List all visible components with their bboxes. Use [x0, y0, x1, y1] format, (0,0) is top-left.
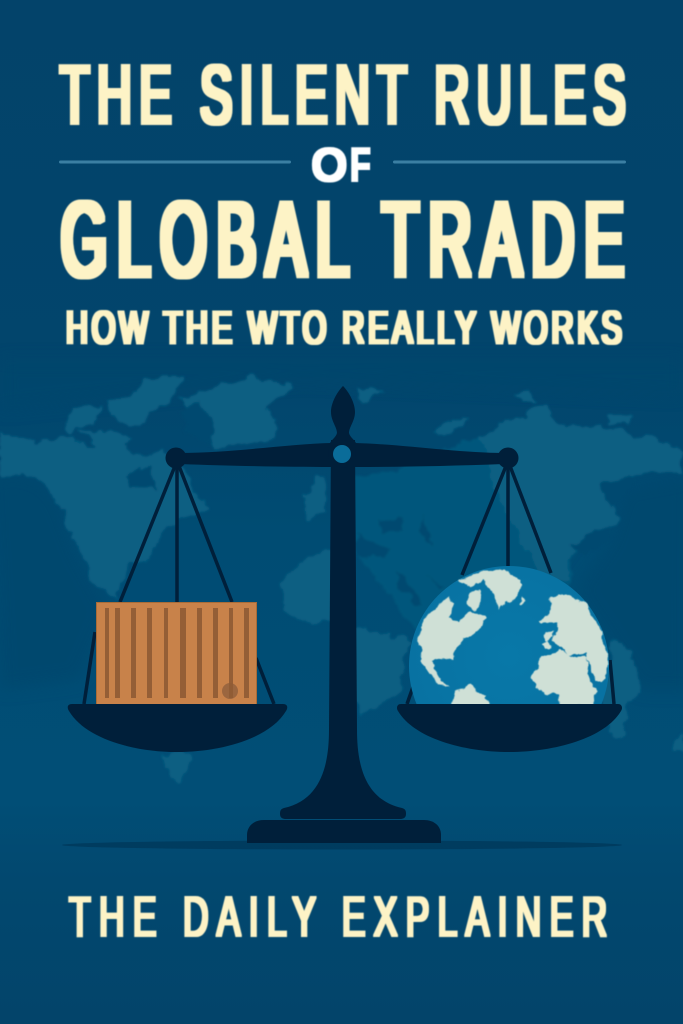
pivot — [328, 440, 356, 468]
word: of — [311, 138, 371, 191]
right pan — [397, 704, 622, 752]
globe — [409, 566, 610, 704]
publisher name: THE DAILY EXPLAINER — [69, 886, 607, 949]
beam end right — [498, 448, 518, 468]
title line two: GLOBAL TRADE — [61, 181, 624, 299]
left pan strings — [84, 466, 274, 704]
word: of: F — [350, 139, 371, 191]
scale base — [247, 820, 441, 843]
south america tip — [163, 753, 195, 780]
africa — [280, 545, 345, 625]
ground shadow — [62, 840, 622, 850]
right pan strings — [407, 466, 614, 704]
north america — [0, 433, 205, 600]
world map backdrop — [0, 360, 683, 780]
divider left — [59, 160, 291, 164]
beam — [180, 443, 504, 467]
left pan — [68, 704, 287, 752]
balance scale — [68, 386, 622, 843]
beam end left — [166, 448, 186, 468]
divider right — [393, 160, 626, 164]
pivot centre — [333, 445, 351, 463]
map europe mid tone — [345, 437, 572, 640]
scale post and base — [280, 440, 406, 819]
title line one: THE SILENT RULES — [60, 50, 625, 141]
finial — [329, 386, 357, 446]
greenland — [178, 376, 293, 450]
subtitle: HOW THE WTO REALLY WORKS — [66, 303, 622, 354]
word: of: O — [311, 138, 348, 191]
asia — [479, 407, 683, 580]
shipping container — [96, 602, 256, 704]
australia — [600, 640, 640, 738]
map seas — [127, 467, 157, 490]
